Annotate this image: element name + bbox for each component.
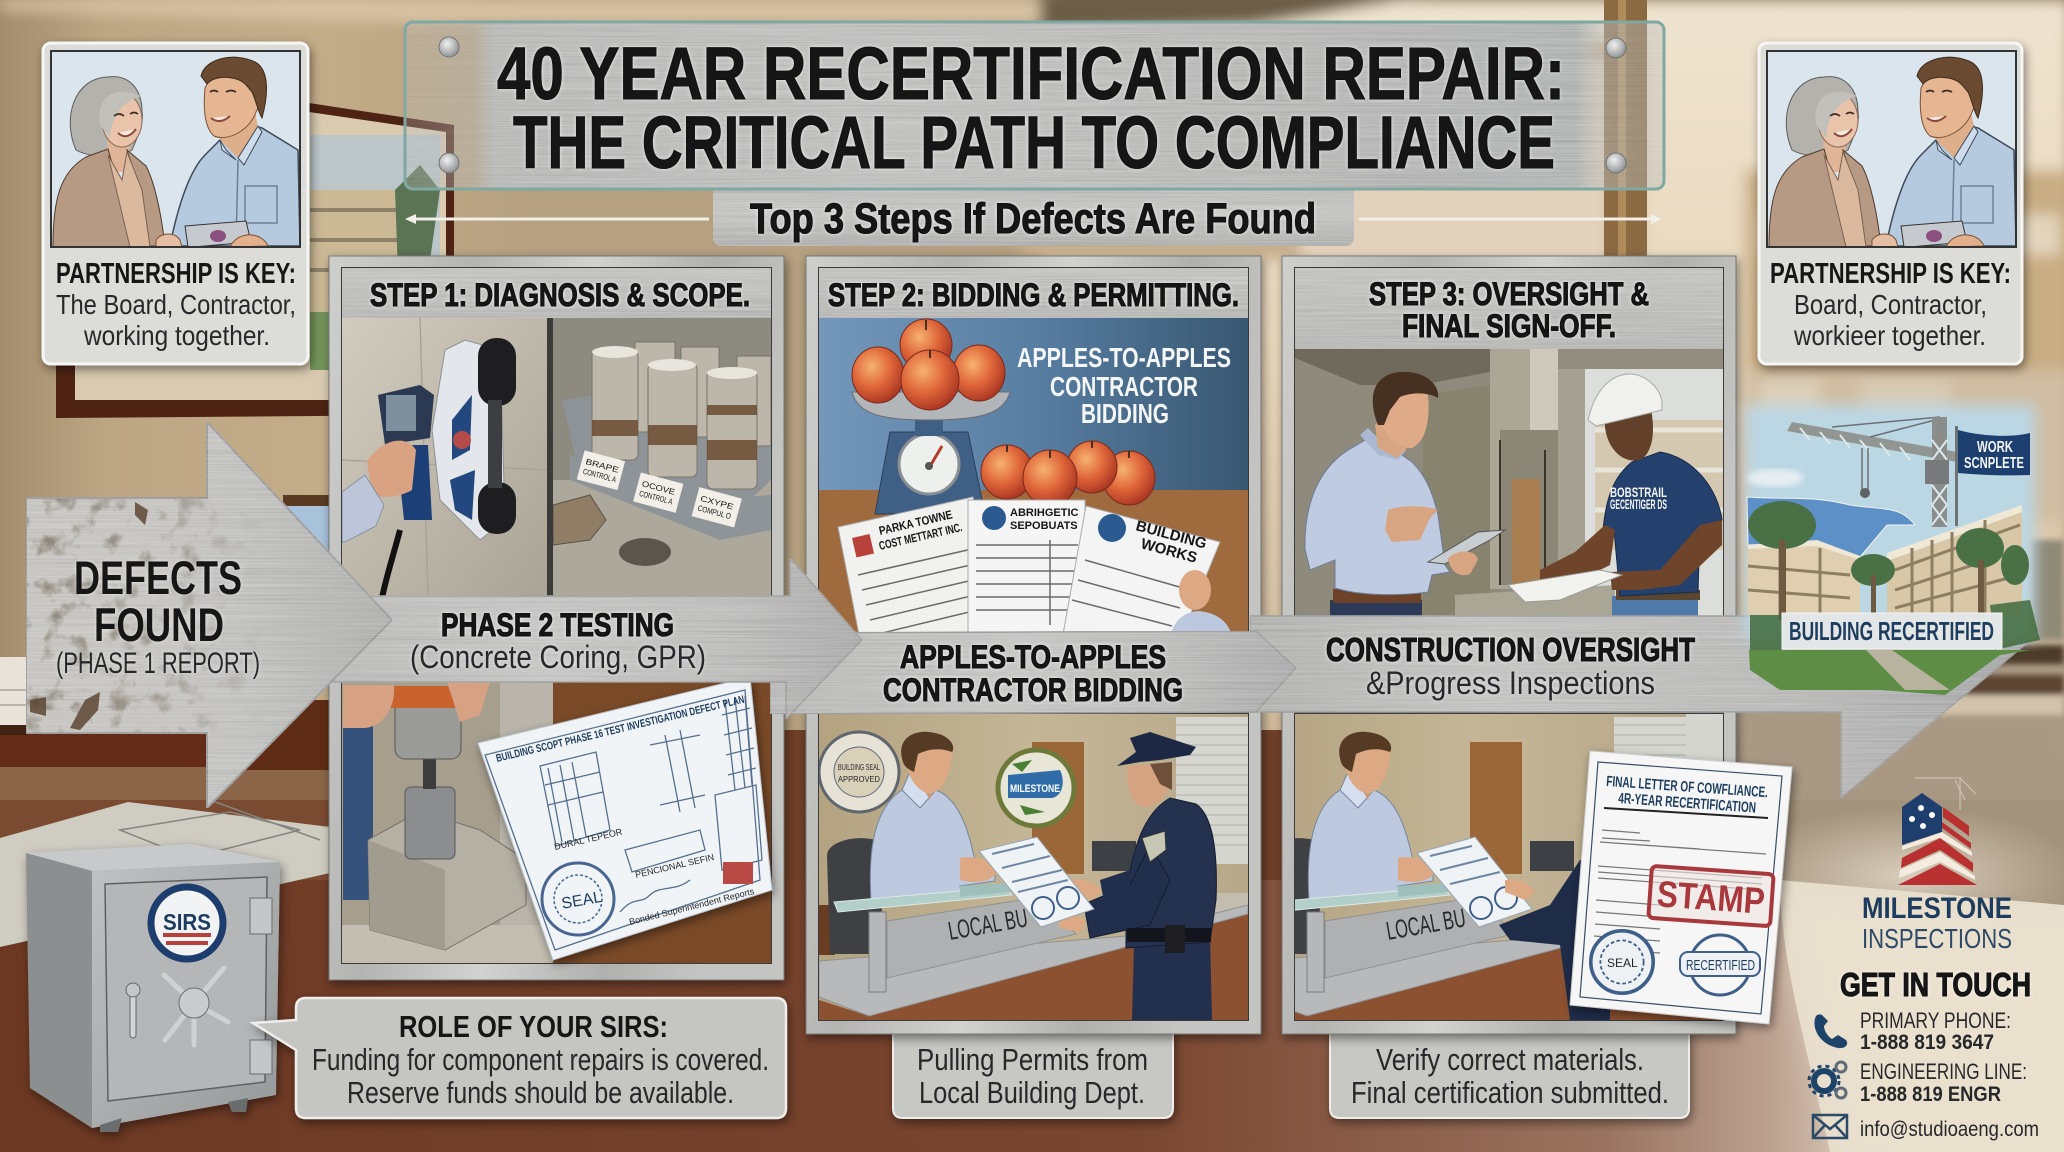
photo: site inspection	[1295, 349, 1723, 616]
recertified stamp: RECERTIFIED	[1686, 957, 1755, 974]
arrow: right	[1359, 214, 1662, 224]
label: apples to apples on wall	[1017, 342, 1231, 429]
panel: step 1 diagnosis and scope	[329, 256, 784, 980]
illustration: board member and contractor, right	[1767, 51, 2016, 247]
photo: permit counter: LOCAL BU	[946, 902, 1030, 946]
callout: role of your SIRS	[253, 998, 786, 1118]
emblem: SIRS: SIRS	[163, 909, 211, 935]
caption: verify materials	[1330, 1030, 1689, 1118]
recertified stamp	[1680, 935, 1760, 995]
arrow: defects found: FOUND	[94, 598, 224, 651]
permit document	[979, 837, 1094, 927]
background: office with window and desk	[0, 0, 2064, 760]
bid document: Parka Towne: PARKA TOWNE	[878, 507, 954, 538]
emblem: SIRS	[151, 887, 223, 959]
bid document: Parka Towne: COST METTART INC.	[878, 520, 963, 553]
photo: concrete core samples: OCOVE	[641, 479, 676, 497]
bid document: Building Works: BUILDING	[1134, 517, 1208, 553]
contact: primary phone: PRIMARY PHONE:	[1860, 1008, 2011, 1033]
seal: Milestone green	[998, 750, 1074, 826]
safe: SIRS reserve funds	[26, 844, 280, 1132]
blueprint: building scope plan	[478, 677, 772, 960]
arrow: defects found: DEFECTS	[74, 551, 242, 604]
contact: email: info@studioaeng.com	[1860, 1118, 2039, 1141]
arrow band: phase 2 testing	[300, 558, 862, 719]
photo: concrete core samples	[553, 318, 771, 596]
logo: Milestone Inspections	[1862, 778, 2012, 954]
panel: step 2 bidding and permitting: STEP 2: BIDDING & PERMITTING.	[828, 277, 1239, 313]
bid document: Parka Towne	[838, 497, 996, 640]
photo: GPR scanner on wall	[342, 318, 547, 596]
crane	[1787, 417, 1957, 527]
arrow band: apples-to-apples contractor bidding	[770, 631, 1296, 714]
inspector	[1305, 372, 1505, 619]
subtitle plate with arrows: Top 3 Steps If Defects Are Found	[750, 195, 1316, 243]
photo: final submission counter	[1295, 714, 1723, 1020]
card: partnership is key (right)	[1759, 43, 2022, 364]
caption: pulling permits	[893, 1030, 1173, 1118]
flag: work complete	[1955, 426, 2030, 526]
blueprint: building scope plan: DURAL TEPEOR	[553, 826, 624, 852]
photo: concrete core samples: CXYPE	[699, 494, 735, 512]
flag: work complete: WORK	[1977, 439, 2013, 456]
panel: step 3 oversight and final sign-off: STEP 3: OVERSIGHT &	[1369, 276, 1649, 312]
letter: final letter of compliance: 4R-YEAR RECERTIFICATION	[1618, 790, 1757, 817]
subtitle plate with arrows	[405, 180, 1662, 246]
label: apples to apples on wall: CONTRACTOR	[1050, 371, 1198, 402]
panel: step 3 oversight and final sign-off: FINAL SIGN-OFF.	[1402, 308, 1616, 344]
bid document: Abrihgetic	[968, 500, 1085, 640]
arrow: left	[405, 214, 709, 224]
stamp: STAMP	[1656, 873, 1766, 922]
bid document: Building Works	[1062, 506, 1220, 640]
arrow band: apples-to-apples contractor bidding: APPLES-TO-APPLES	[900, 639, 1166, 675]
arrow band: apples-to-apples contractor bidding: CONTRACTOR BIDDING	[883, 672, 1183, 708]
contractor: BOBSTRAIL	[1610, 484, 1667, 500]
photo: concrete core samples: CONTROL A	[638, 489, 674, 507]
officer	[1057, 732, 1216, 1020]
letter: final letter of compliance: FINAL LETTER OF COWFLIANCE.	[1606, 773, 1769, 801]
callout: role of your SIRS: Funding for component repairs is covered.	[312, 1042, 769, 1077]
illustration: board member and contractor	[51, 51, 300, 247]
caption: verify materials: Verify correct materials.	[1376, 1042, 1644, 1077]
blueprint on desk	[0, 800, 330, 947]
letter: final letter of compliance	[1570, 751, 1792, 1024]
flag: work complete: SCNPLETE	[1964, 455, 2024, 472]
title plate: 40 YEAR RECERTIFICATION REPAIR:	[497, 32, 1565, 115]
title plate: THE CRITICAL PATH TO COMPLIANCE	[513, 101, 1555, 184]
seal stamp: SEAL	[1607, 956, 1638, 970]
seal: building department	[819, 732, 899, 812]
card: partnership is key (left)	[43, 43, 308, 364]
title plate	[405, 22, 1664, 189]
card: partnership is key (left): working together.	[83, 320, 270, 351]
contact: engineering line	[1860, 1059, 2027, 1106]
photo: concrete core samples: COMPUL O	[697, 504, 732, 521]
arrow band: construction oversight	[1250, 560, 2039, 798]
label: building recertified	[1782, 613, 2002, 649]
photo: final submission counter: LOCAL BU	[1384, 902, 1468, 946]
contact: primary phone: 1-888 819 3647	[1860, 1031, 1994, 1054]
contact block	[1809, 966, 2039, 1141]
seal: Milestone green: MILESTONE	[1010, 783, 1060, 795]
blueprint: building scope plan: SEAL	[560, 889, 604, 913]
logo: Milestone Inspections: MILESTONE	[1862, 892, 2012, 925]
seal: building department: APPROVED	[838, 775, 880, 784]
panel: step 2 bidding and permitting	[806, 256, 1261, 1034]
contractor	[1508, 374, 1722, 619]
arrow: defects found: (PHASE 1 REPORT)	[56, 647, 260, 680]
photo: permit counter	[819, 714, 1248, 1020]
arrow band: phase 2 testing: PHASE 2 TESTING	[441, 607, 674, 643]
desk surface and lower wall	[0, 540, 2064, 1152]
photo: concrete core samples: BRAPE	[585, 457, 620, 475]
label: apples to apples on wall: BIDDING	[1081, 398, 1169, 429]
contact: engineering line: 1-888 819 ENGR	[1860, 1083, 2001, 1106]
blueprint: building scope plan: BUILDING SCOPT PHASE 16 TEST INVESTIGATION DEFECT PLAN	[495, 694, 746, 765]
arrow band: construction oversight: CONSTRUCTION OVERSIGHT	[1326, 631, 1695, 668]
arrow: defects found	[26, 422, 392, 808]
card: partnership is key (right): Board, Contractor,	[1794, 289, 1987, 320]
photo: concrete core samples: CONTROL A	[582, 467, 618, 484]
arrow band: phase 2 testing: (Concrete Coring, GPR)	[410, 639, 706, 675]
seal stamp	[1591, 931, 1653, 993]
photo: apples on scale with bids	[819, 318, 1248, 632]
seal: building department: BUILDING SEAL	[838, 763, 880, 772]
logo: Milestone Inspections: INSPECTIONS	[1862, 923, 2012, 954]
illustration: building recertified with crane	[1745, 405, 2040, 695]
arrow band: construction oversight: &Progress Inspections	[1366, 665, 1655, 701]
bid document: Building Works: WORKS	[1139, 535, 1199, 567]
panel: step 1 diagnosis and scope: STEP 1: DIAGNOSIS & SCOPE.	[370, 277, 750, 313]
card: partnership is key (left): PARTNERSHIP IS KEY:	[56, 258, 296, 290]
card: partnership is key (left): The Board, Contractor,	[56, 289, 296, 320]
icon: phone	[1814, 1014, 1847, 1048]
contractor: GECENTIGER DS	[1610, 496, 1667, 512]
panel: step 3 oversight and final sign-off	[1257, 256, 1736, 1034]
photo: core drill on concrete block	[342, 682, 553, 963]
callout: role of your SIRS: ROLE OF YOUR SIRS:	[399, 1009, 668, 1044]
blueprint: building scope plan: PENCIONAL SEFIN	[634, 852, 715, 880]
bid document: Abrihgetic: SEPOBUATS	[1010, 520, 1078, 532]
card: partnership is key (right): workieer together.	[1793, 320, 1986, 351]
caption: pulling permits: Local Building Dept.	[919, 1075, 1145, 1110]
caption: verify materials: Final certification submitted.	[1351, 1075, 1669, 1110]
callout: role of your SIRS: Reserve funds should be available.	[347, 1075, 734, 1110]
blueprint: building scope plan: Bonded Superintendent Reports	[628, 886, 756, 927]
icon: gears	[1809, 1062, 1846, 1098]
bid document: Abrihgetic: ABRIHGETIC	[1010, 507, 1078, 519]
caption: pulling permits: Pulling Permits from	[917, 1042, 1148, 1077]
contact: primary phone	[1860, 1008, 2011, 1054]
icon: envelope	[1813, 1115, 1847, 1138]
